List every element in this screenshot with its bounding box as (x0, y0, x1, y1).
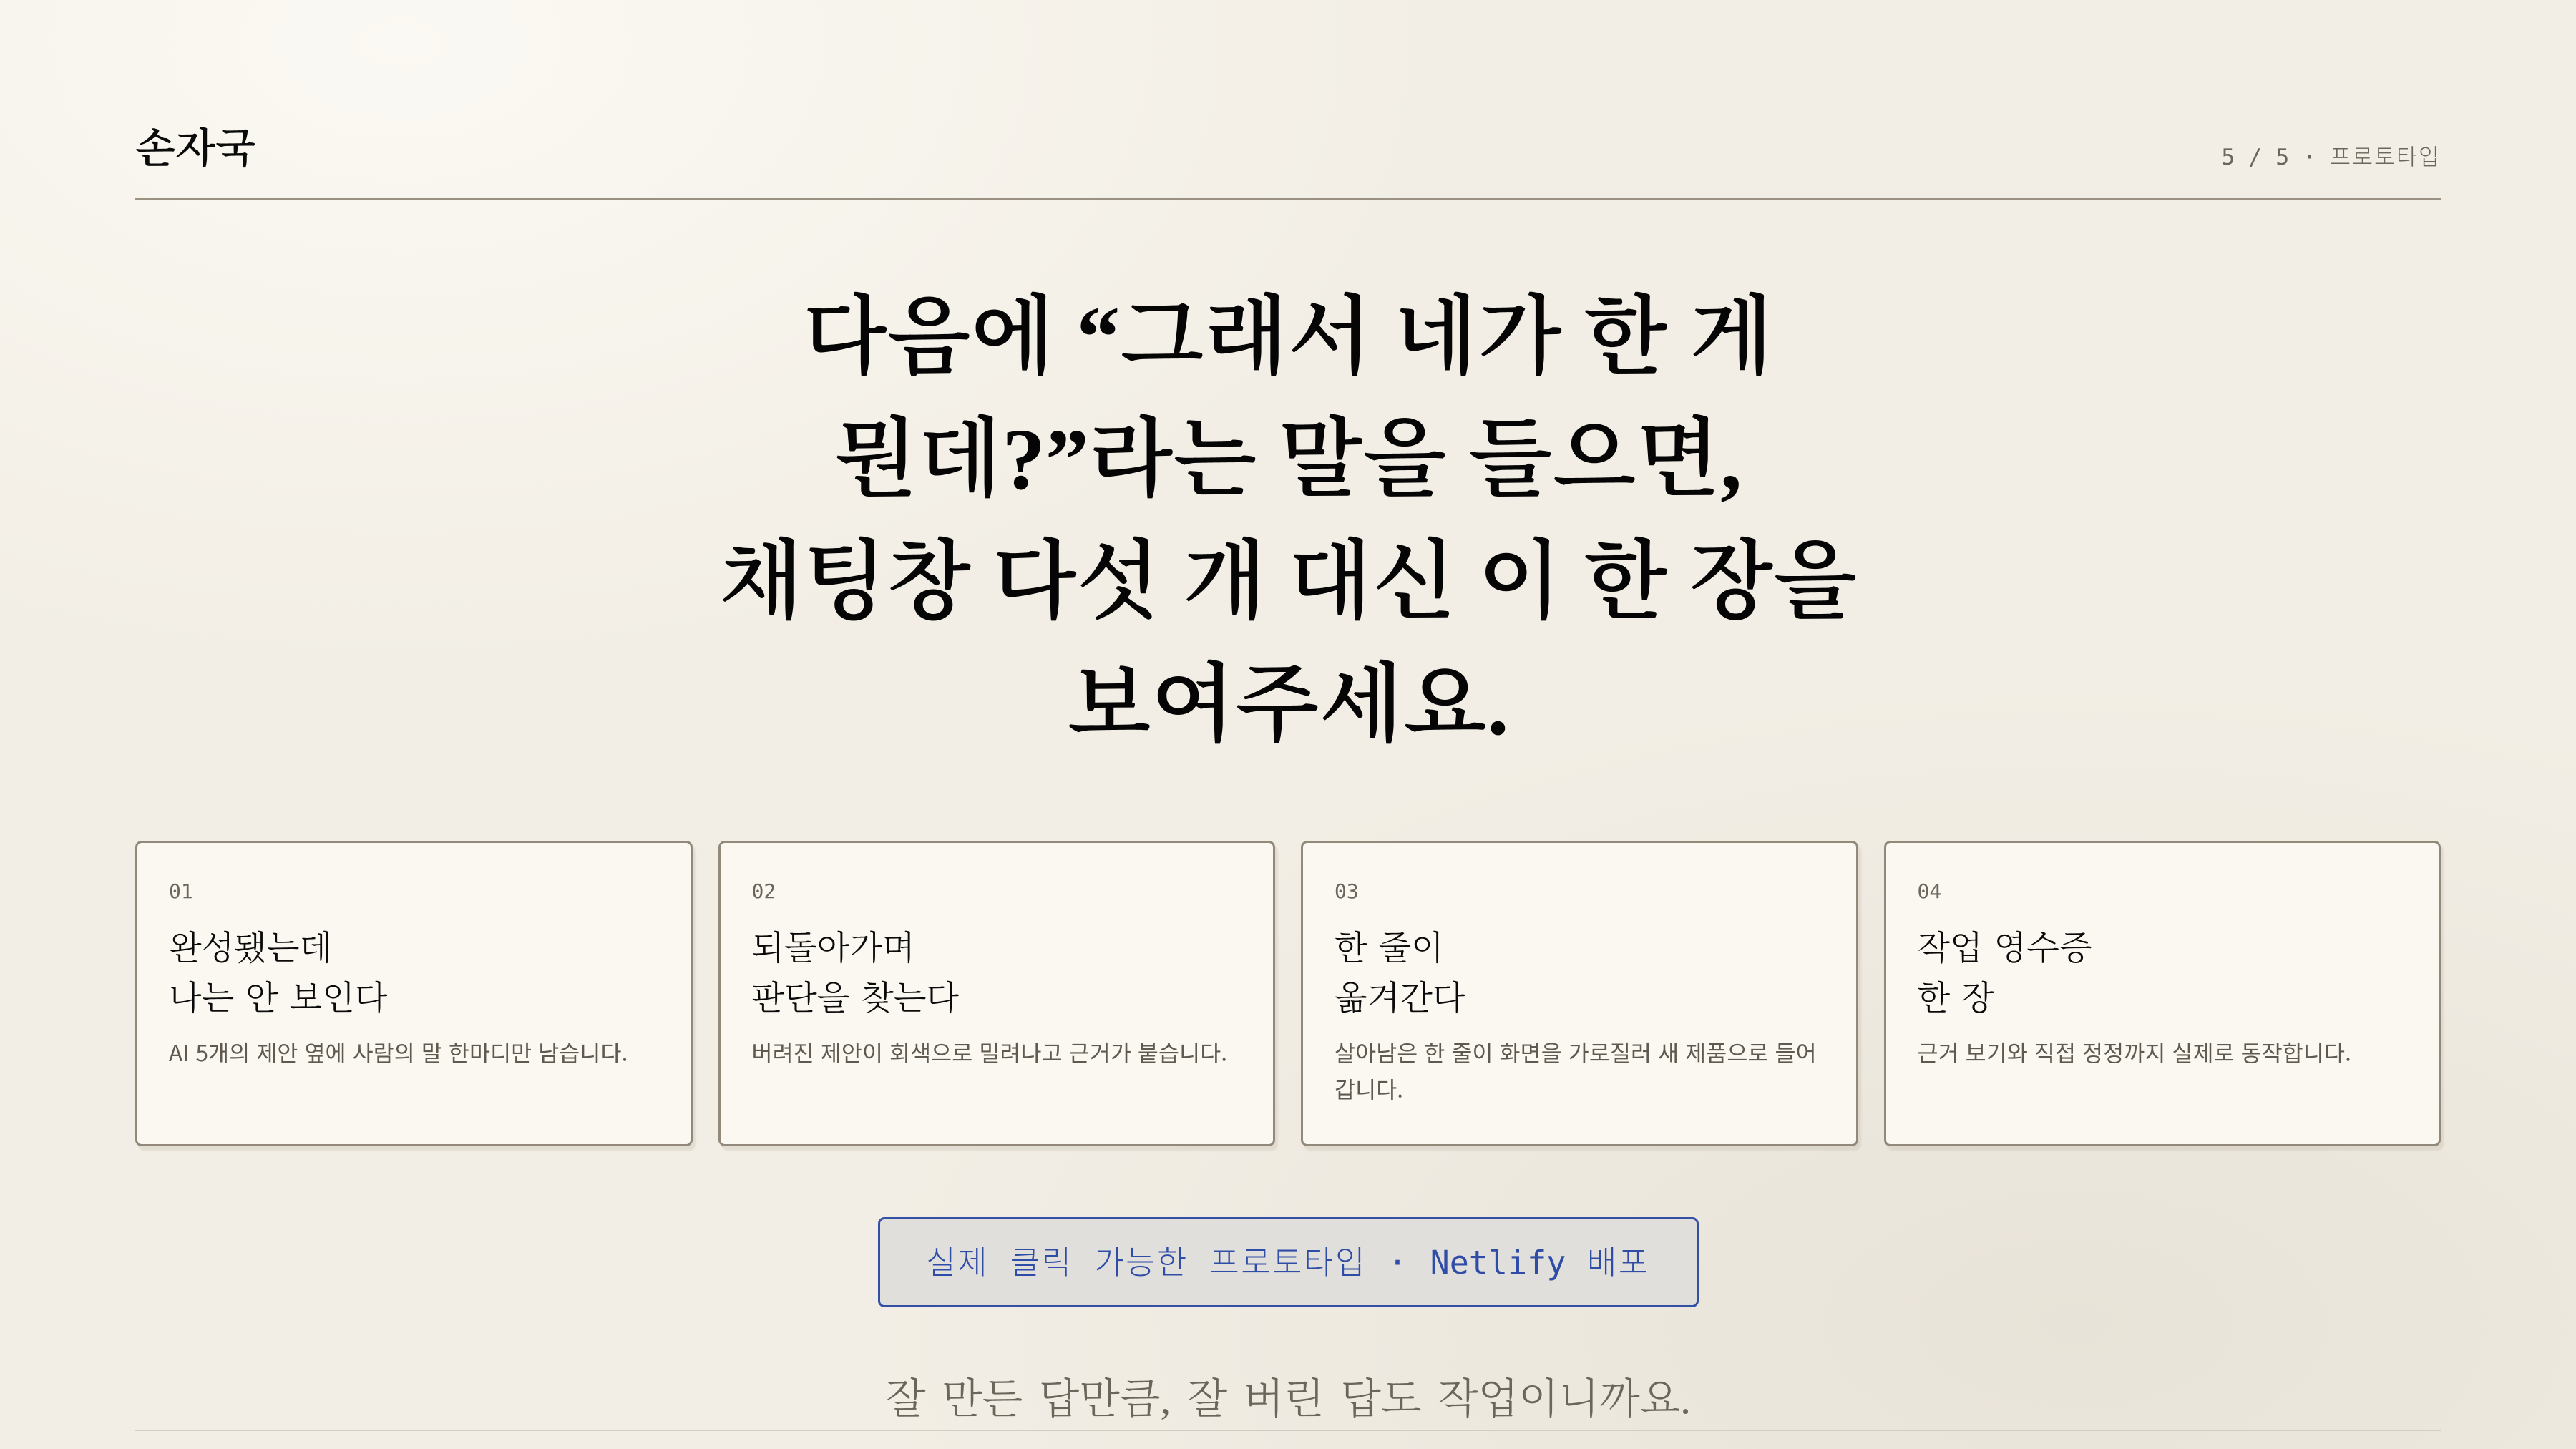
card 03: 한 줄이 (1335, 930, 1444, 967)
card 02: 되돌아가며 (751, 930, 915, 967)
prototype link pill (877, 1217, 1699, 1307)
card 04: 04 (1918, 879, 1941, 903)
closing line: 잘 만든 답만큼, 잘 버린 답도 작업이니까요. (885, 1376, 1691, 1423)
card 04 (1883, 841, 2441, 1146)
card 01: 01 (169, 879, 193, 903)
card 02: 판단을 찾는다 (751, 980, 959, 1018)
card 03: 살아남은 한 줄이 화면을 가로질러 새 제품으로 들어 (1335, 1035, 1817, 1068)
card 01: AI 5개의 제안 옆에 사람의 말 한마디만 남습니다. (169, 1035, 628, 1068)
header rule (135, 197, 2441, 200)
card 03 (1301, 841, 1858, 1146)
card 03: 옮겨간다 (1335, 980, 1465, 1018)
card 02: 02 (751, 879, 776, 903)
card 01: 완성됐는데 (169, 930, 332, 967)
main heading: 뭔데?”라는 말을 들으면, (834, 412, 1742, 508)
card 04: 한 장 (1918, 980, 1994, 1018)
page indicator: 5 / 5 · 프로토타입 (2221, 145, 2441, 170)
main heading: 보여주세요. (1067, 658, 1509, 753)
prototype link pill: 실제 클릭 가능한 프로토타입 · Netlify 배포 (926, 1244, 1650, 1282)
card 03: 03 (1335, 879, 1359, 903)
card 01 (135, 841, 693, 1146)
card 01: 나는 안 보인다 (169, 980, 388, 1018)
main heading: 다음에 “그래서 네가 한 게 (803, 290, 1773, 386)
brand title: 손자국 (135, 125, 255, 172)
main heading: 채팅창 다섯 개 대신 이 한 장을 (719, 535, 1857, 630)
card 04: 작업 영수증 (1918, 930, 2092, 967)
main heading (719, 290, 1857, 753)
card 03: 갑니다. (1335, 1072, 1403, 1105)
footer rule (135, 1430, 2441, 1431)
card 04: 근거 보기와 직접 정정까지 실제로 동작합니다. (1918, 1035, 2351, 1068)
card 02: 버려진 제안이 회색으로 밀려나고 근거가 붙습니다. (751, 1035, 1227, 1068)
card 02 (718, 841, 1275, 1146)
